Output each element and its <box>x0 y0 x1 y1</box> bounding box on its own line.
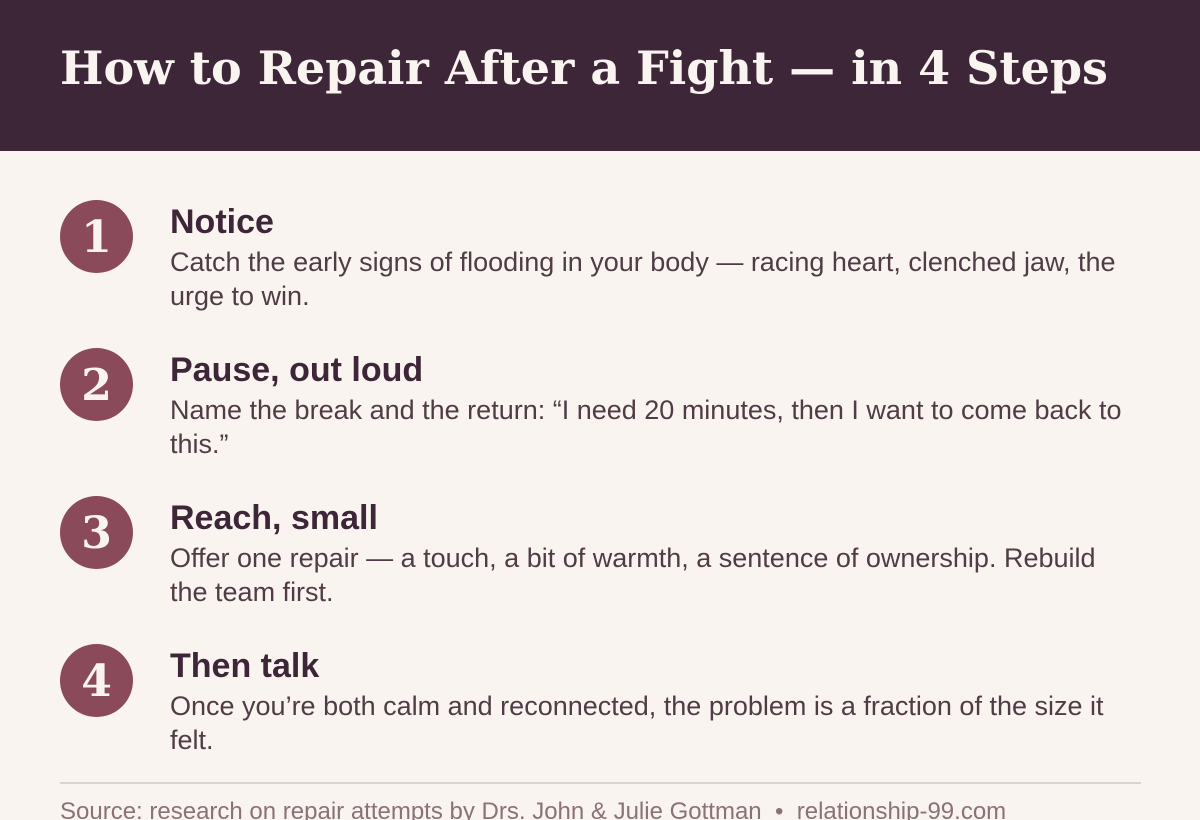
step 2 description: this.” <box>170 429 229 459</box>
step 3 heading: Reach, small <box>170 499 378 537</box>
number badge 4 <box>60 644 133 717</box>
step 3 description: the team first. <box>170 577 334 607</box>
number badge 1 <box>60 200 133 273</box>
number badge 3 <box>60 496 133 569</box>
step 2 description <box>170 395 1122 459</box>
number badge 2: 2 <box>81 360 112 411</box>
step 1 description: Catch the early signs of flooding in your body — racing heart, clenched jaw, the <box>170 247 1116 277</box>
header band <box>0 0 1200 151</box>
number badge 4: 4 <box>81 656 112 707</box>
step 2 description: Name the break and the return: “I need 20 minutes, then I want to come back to <box>170 395 1122 425</box>
step 4 description <box>170 691 1104 755</box>
step 4: Then talk <box>60 644 1104 755</box>
number badge 3: 3 <box>81 508 112 559</box>
step 4 heading: Then talk <box>170 647 319 685</box>
step 3 description: Offer one repair — a touch, a bit of warmth, a sentence of ownership. Rebuild <box>170 543 1096 573</box>
step 2 heading: Pause, out loud <box>170 351 423 389</box>
step 4 description: felt. <box>170 725 214 755</box>
step 3 description <box>170 543 1096 607</box>
number badge 2 <box>60 348 133 421</box>
number badge 1: 1 <box>81 212 112 263</box>
step 3: Reach, small <box>60 496 1096 607</box>
step 1: Notice <box>60 200 1116 311</box>
title: How to Repair After a Fight — in 4 Steps <box>60 41 1108 95</box>
step 1 description: urge to win. <box>170 281 310 311</box>
step 1 heading: Notice <box>170 203 274 241</box>
step 4 description: Once you’re both calm and reconnected, the problem is a fraction of the size it <box>170 691 1104 721</box>
step 1 description <box>170 247 1116 311</box>
step 2: Pause, out loud <box>60 348 1122 459</box>
